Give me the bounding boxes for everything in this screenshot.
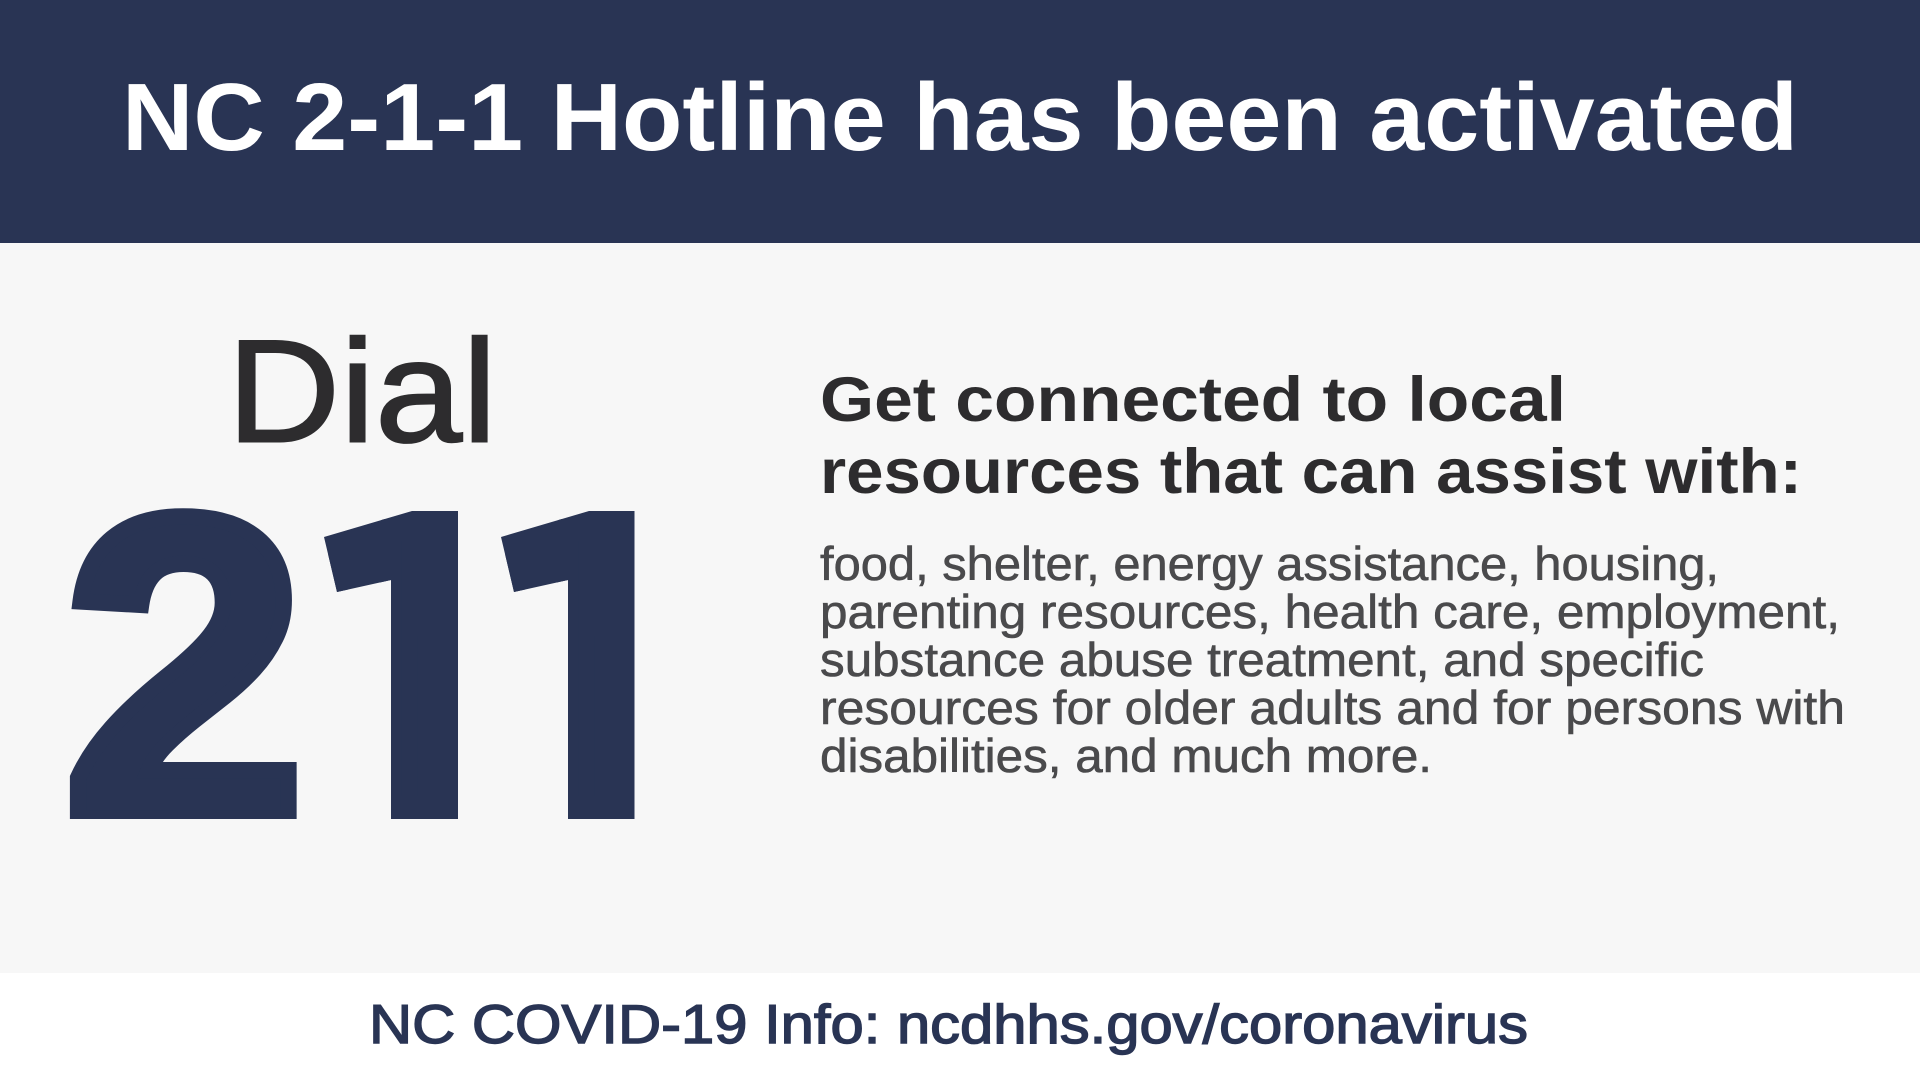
- footer link text: NC COVID-19 Info: ncdhhs.gov/coronavirus: [369, 993, 1528, 1055]
- big number 211: [70, 508, 634, 819]
- big number 211: 1: [455, 425, 697, 912]
- dial label: Dial: [227, 310, 497, 472]
- panel: main content: [70, 334, 1842, 819]
- resource list text: food, shelter, energy assistance, housing,: [820, 537, 1719, 590]
- big number 211: 2: [63, 428, 306, 912]
- resource list text: substance abuse treatment, and specific: [820, 633, 1704, 686]
- subheading: [820, 365, 1802, 507]
- resource list text: [820, 537, 1845, 782]
- resource list text: disabilities, and much more.: [820, 729, 1432, 782]
- subheading: Get connected to local: [820, 365, 1566, 435]
- big number 211: 1: [278, 425, 520, 912]
- panel: header banner: [0, 0, 1920, 243]
- subheading: resources that can assist with:: [820, 437, 1802, 507]
- resource list text: resources for older adults and for persons with: [820, 681, 1845, 734]
- panel: footer: [0, 973, 1920, 1080]
- title: NC 2-1-1 Hotline has been activated: [122, 64, 1798, 171]
- resource list text: parenting resources, health care, employment,: [820, 585, 1840, 638]
